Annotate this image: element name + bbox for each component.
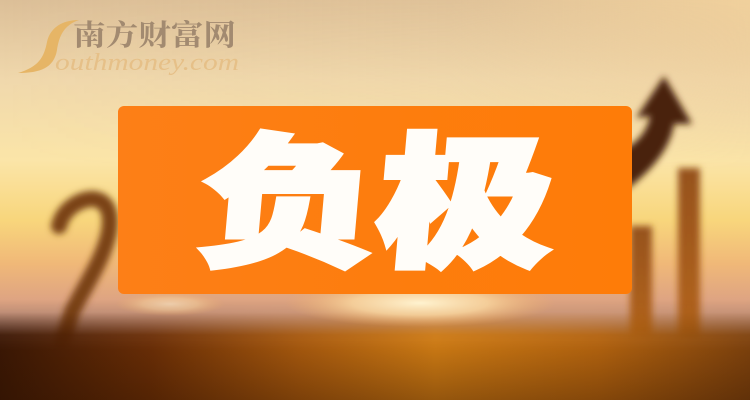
logo Chinese name: 南方财富网 (73, 13, 236, 54)
logo mark: swoosh S (18, 20, 79, 73)
logo: Southmoney (18, 13, 239, 76)
orange title panel (118, 106, 632, 294)
blurred bar silhouettes (630, 168, 700, 338)
blurred rising arrow silhouette (622, 76, 692, 190)
title text: 负极 (194, 89, 564, 296)
logo English name: outhmoney.com (55, 49, 239, 76)
background: ground band and sun glow (0, 294, 750, 400)
blurred digit 2 silhouette (59, 199, 110, 345)
